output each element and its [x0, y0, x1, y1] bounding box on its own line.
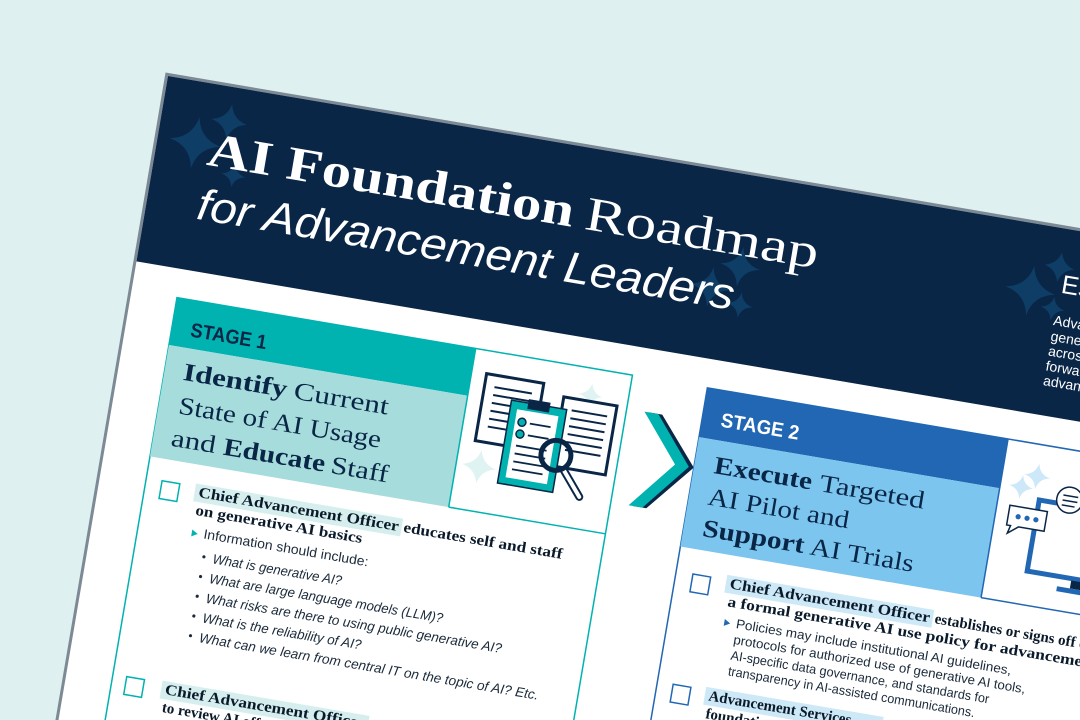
panel: stage 1: State of AI Usage — [177, 393, 383, 454]
icon: clipboard with documents and magnifier — [459, 364, 620, 505]
header right intro text — [1042, 269, 1080, 428]
checklist item 1: What is generative AI? — [211, 551, 344, 588]
stage 2 title area — [680, 437, 1000, 598]
panel: stage 1 — [60, 298, 632, 720]
checklist item 1 (stage 2) — [677, 569, 1080, 720]
checklist item 1: Information should include: — [202, 527, 370, 569]
checklist item 1: educates self and staff — [402, 520, 565, 563]
checklist item 1: on generative AI basics — [194, 503, 364, 547]
checklist item 1 (stage 2): Chief Advancement Officer — [728, 576, 932, 626]
checklist item 1: Chief Advancement Officer — [197, 485, 400, 535]
panel: stage 2 — [590, 388, 1080, 720]
panel: stage 2: Targeted — [818, 470, 927, 515]
checklist item 2 — [121, 675, 525, 720]
panel: stage 1: Identify — [181, 359, 290, 403]
panel: stage 1: Current — [292, 378, 391, 420]
panel: stage 2: Support — [700, 515, 807, 559]
panel: stage 2: AI Pilot and — [706, 484, 852, 534]
icon: monitor with chat bubbles — [993, 459, 1080, 604]
panel: stage 2: STAGE 2 — [719, 410, 801, 445]
checklist item 1: What risks are there to using public generative AI? — [205, 591, 503, 656]
checklist item 1 (stage 2): AI-specific data governance, and standards for — [730, 648, 991, 706]
checklist item 1: What is the reliability of AI? — [201, 611, 363, 652]
header band — [136, 76, 1080, 462]
panel: stage 1: and — [169, 425, 219, 459]
checklist item 1 (stage 2): transparency in AI-assisted communications. — [727, 663, 976, 720]
checklist item 1 — [136, 478, 565, 703]
checklist item 1 (stage 2): a formal generative AI use policy for advancement — [726, 594, 1080, 673]
stage 2 label band — [699, 388, 1008, 488]
checklist item 2 (stage 2) — [668, 681, 973, 720]
stage 1 label band — [169, 298, 476, 396]
panel: stage 2: AI Trials — [808, 533, 916, 578]
panel: stage 1: Staff — [329, 452, 391, 489]
arrow: chevron stage 1 to stage 2 — [629, 412, 702, 515]
panel: stage 1: Educate — [221, 434, 327, 478]
checklist item 1: What are large language models (LLM)? — [208, 571, 445, 626]
panel: stage 1: STAGE 1 — [189, 320, 268, 354]
title — [204, 123, 823, 279]
panel: stage 2: Execute — [712, 452, 814, 496]
checklist item 1: What can we learn from central IT on the topic of AI? Etc. — [198, 630, 540, 703]
sparkles: header left — [156, 95, 1078, 372]
subtitle: for Advancement Leaders — [194, 180, 738, 320]
stage 1 title area — [150, 345, 468, 507]
checklist item 1 (stage 2): Policies may include institutional AI guidelines, — [735, 616, 1013, 678]
title: AI Foundation — [204, 123, 578, 238]
title: Roadmap — [581, 187, 823, 279]
checklist item 1 (stage 2): protocols for authorized use of generative AI tools, — [732, 632, 1027, 696]
